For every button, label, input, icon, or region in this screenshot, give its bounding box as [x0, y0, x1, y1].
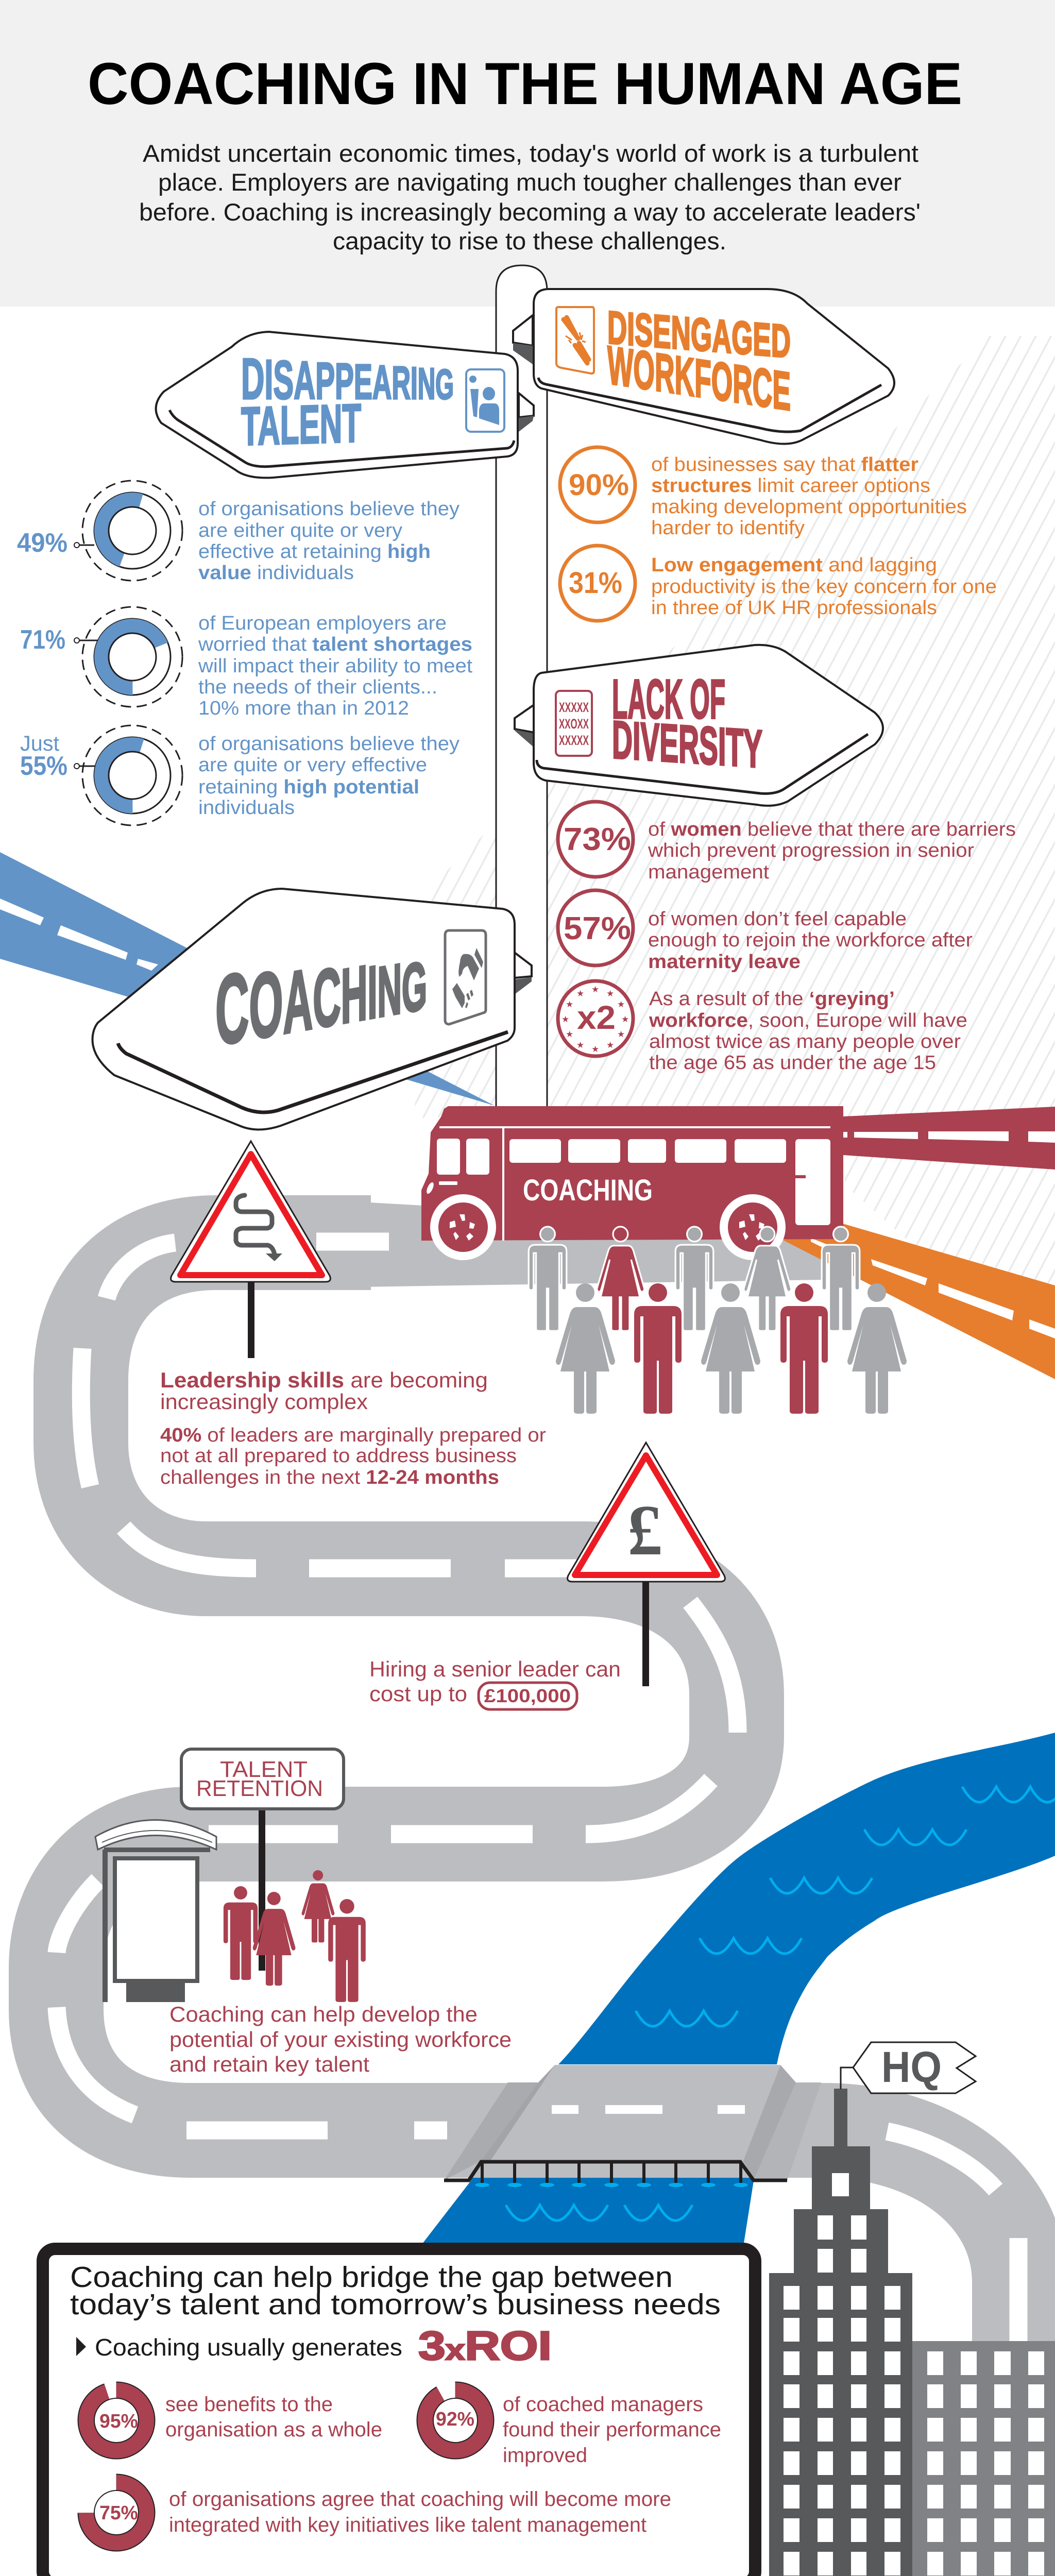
people group at bus [529, 1227, 907, 1414]
text: hiring cost [369, 1657, 621, 1709]
3x ROI callout: 3xROI [418, 2323, 552, 2368]
stat text 90% [651, 454, 967, 539]
icon: person at board [466, 369, 504, 432]
sign shadow line [537, 734, 868, 793]
signpost pole [496, 265, 547, 1108]
text: leadership skills: increasingly complex [160, 1389, 368, 1414]
stat text 95%: see benefits to the [165, 2393, 333, 2416]
sign shadow line [538, 378, 881, 432]
panel: disengaged workforce [513, 289, 894, 444]
panel: lack of diversity [515, 645, 883, 806]
intro text block: Amidst uncertain economic times, today's world of work is a turbulent [143, 140, 918, 167]
intro text block [139, 140, 921, 255]
panel: disengaged workforce statistics [560, 447, 997, 621]
icon: rows of x marks: XXXXX [559, 733, 589, 748]
header background panel [0, 0, 1055, 307]
stat text 49%: effective at retaining high [198, 541, 431, 563]
stat text x2: the age 65 as under the age 15 [649, 1052, 936, 1074]
stat text 49%: of organisations believe they [198, 498, 460, 520]
intro text block: place. Employers are navigating much tougher challenges than ever [158, 168, 901, 196]
stat text 73% [648, 819, 1016, 883]
river waves [506, 1787, 1055, 2221]
sign: disappearing talent [156, 332, 518, 478]
river [420, 1733, 1055, 2246]
stat text 49% [198, 498, 460, 584]
heading: disappearing talent: TALENT [241, 393, 361, 457]
donut chart: 71% [74, 607, 182, 707]
bridge deck dashes [552, 2105, 745, 2114]
stat text x2 [649, 988, 967, 1074]
stat text 75%: of organisations agree that coaching will become more [169, 2488, 671, 2511]
panel heading: Coaching can help bridge the gap between [70, 2261, 673, 2294]
sign: talent retention: TALENT [220, 1757, 308, 1782]
stat text 90%: structures limit career options [651, 475, 930, 497]
stat text 90%: making development opportunities [651, 496, 967, 518]
bus windows [425, 1126, 830, 1241]
stat text 57% [648, 908, 973, 973]
text: leadership skills [160, 1368, 546, 1488]
stat text 31%: productivity is the key concern for one [651, 576, 997, 598]
stat text 95% [165, 2393, 382, 2441]
panel heading [70, 2261, 721, 2321]
stat text 49%: value individuals [198, 562, 354, 584]
blue road [0, 852, 495, 1106]
hatched background [415, 336, 1055, 1370]
sign: lack of diversity [534, 645, 883, 806]
donut chart: 92% [426, 2391, 485, 2450]
panel: coaching bridges the gap [43, 2249, 755, 2576]
rear building [912, 2341, 1055, 2576]
text: leadership skills: not at all prepared to address business [160, 1445, 517, 1467]
bus body [421, 1106, 843, 1241]
stat text x2: workforce , soon, Europe will have [649, 1010, 967, 1031]
stat text 31% [651, 554, 997, 619]
sign back stub [515, 704, 535, 748]
stat circle 90% [560, 447, 635, 522]
bus front wheel [430, 1194, 496, 1260]
donut chart: 75% [87, 2482, 146, 2543]
text: hiring cost: Hiring a senior leader can [369, 1657, 621, 1681]
stat text 55%: of organisations believe they [198, 733, 460, 755]
arrow bullet [76, 2337, 86, 2356]
orange road [783, 1224, 1055, 1379]
bus [421, 1106, 843, 1260]
panel: coaching sign [93, 889, 532, 1129]
heading: lack of diversity: DIVERSITY [612, 710, 762, 779]
text: leadership skills: Leadership skills are becoming [160, 1368, 488, 1392]
sign back stub [519, 393, 534, 432]
bus shelter [95, 1820, 216, 2002]
stat text 73%: management [648, 861, 769, 883]
stat text 71%: will impact their ability to meet [198, 655, 472, 677]
stat text 71%: the needs of their clients... [198, 676, 437, 698]
stat text 55%: retaining high potential [198, 776, 419, 798]
text: hiring cost: cost up to [369, 1682, 467, 1706]
road sign: winding road [171, 1141, 330, 1358]
tower windows [784, 2173, 1044, 2575]
donut chart: 55% [74, 725, 182, 825]
stat text 75%: integrated with key initiatives like talent management [169, 2514, 646, 2536]
stat text 71%: worried that talent shortages [198, 634, 472, 655]
sign: coaching [93, 889, 515, 1129]
main tower [769, 2089, 912, 2576]
intro text block: capacity to rise to these challenges. [333, 227, 726, 255]
donut chart: 92%: 92% [436, 2409, 474, 2430]
stat text 75% [169, 2488, 671, 2536]
intro text block: before. Coaching is increasingly becoming a way to accelerate leaders' [139, 198, 921, 226]
stat text 49%: are either quite or very [198, 520, 402, 541]
stat text 55%: are quite or very effective [198, 754, 427, 776]
stat circle x2 with stars: x2 [577, 999, 616, 1036]
bridge water ripples [475, 2183, 748, 2187]
text: talent development [169, 2002, 512, 2076]
stat text 92%: found their performance [503, 2418, 721, 2441]
stat circle 57% [558, 890, 633, 965]
text: leadership skills: 40% of leaders are marginally prepared or [160, 1425, 546, 1446]
stat label: Just 55%: 55% [20, 751, 67, 781]
icon: broken chain [556, 307, 594, 374]
text: talent development: and retain key talent [169, 2052, 369, 2076]
back row figures [529, 1227, 860, 1331]
donut chart: 49% [74, 481, 182, 581]
stat text 73%: of women believe that there are barriers [648, 819, 1016, 840]
stat label 71%: 71% [20, 625, 65, 655]
icon: rows of x marks: XXOXX [559, 716, 589, 732]
stat text x2: almost twice as many people over [649, 1031, 961, 1053]
stat text 95%: organisation as a whole [165, 2418, 382, 2441]
stat text 55%: individuals [198, 797, 295, 819]
icon: pound symbol: £ [627, 1490, 662, 1570]
panel frame [43, 2249, 755, 2576]
stat text 90%: harder to identify [651, 517, 805, 539]
stat label 49%: 49% [17, 528, 67, 558]
sign: HQ [841, 2042, 976, 2093]
stat circle x2 with stars: ★★★★★★★★★★★★ [561, 985, 629, 1054]
heading: lack of diversity [612, 668, 762, 779]
heading: disappearing talent: DISAPPEARING [241, 347, 454, 411]
sign shadow line [169, 410, 514, 467]
people group at shelter [224, 1870, 366, 2002]
heading: disengaged workforce: DISENGAGED [607, 301, 791, 368]
stat text x2: As a result of the ‘greying’ [649, 988, 895, 1010]
stat text 90%: of businesses say that flatter [651, 454, 918, 476]
heading: lack of diversity: LACK OF [612, 668, 725, 730]
panel: disappearing talent statistics [17, 481, 472, 825]
heading: disappearing talent [241, 347, 454, 457]
stat label: Just 55%: Just [20, 731, 59, 755]
front row figures [556, 1283, 907, 1414]
stat text 71%: of European employers are [198, 613, 447, 634]
stat text 31%: Low engagement and lagging [651, 554, 937, 576]
road centre dashes [57, 1242, 1018, 2342]
stat text 71% [198, 613, 472, 719]
sign back stub [513, 315, 533, 364]
stat circle 90%: 90% [569, 468, 629, 502]
stat text 92%: improved [503, 2444, 587, 2467]
skyscrapers [769, 2089, 1055, 2576]
heading: disengaged workforce [607, 301, 791, 422]
sign: talent retention: RETENTION [196, 1776, 323, 1801]
bridge [444, 2065, 821, 2187]
panel: lack of diversity statistics [558, 802, 1016, 1074]
stat circle 73%: 73% [564, 822, 631, 857]
heading: coaching: COACHING [215, 920, 427, 1066]
bus label: COACHING [523, 1174, 653, 1207]
sign back stub [515, 953, 532, 994]
text: leadership skills: challenges in the next 12-24 months [160, 1467, 499, 1488]
stat text 57%: enough to rejoin the workforce after [648, 929, 973, 951]
panel: disappearing talent [156, 332, 534, 478]
stat text 71%: 10% more than in 2012 [198, 698, 409, 719]
sign: talent retention [181, 1749, 344, 1971]
crimson road [843, 1107, 1055, 1170]
sign: disengaged workforce [534, 289, 894, 444]
text: talent development: potential of your existing workforce [169, 2027, 512, 2052]
ROI sentence: Coaching usually generates [95, 2334, 402, 2361]
heading: disengaged workforce: WORKFORCE [607, 335, 791, 422]
stat circle 31%: 31% [569, 566, 622, 600]
donut chart: 95% [87, 2391, 146, 2450]
stat text 73%: which prevent progression in senior [648, 840, 974, 861]
stat text 31%: in three of UK HR professionals [651, 597, 937, 619]
stat text 92% [503, 2393, 721, 2467]
stat label: Just 55% [20, 731, 67, 781]
bridge railing [444, 2162, 787, 2183]
stat circle 31% [560, 546, 635, 621]
stat circle 73% [558, 802, 633, 877]
title: COACHING IN THE HUMAN AGE [88, 51, 962, 117]
icon: rows of x marks: XXXXX [559, 700, 589, 715]
callout: 100,000 pounds [479, 1683, 577, 1709]
text: talent development: Coaching can help develop the [169, 2002, 478, 2026]
stat text 55% [198, 733, 460, 819]
icon: rows of x marks [556, 691, 592, 756]
stat circle 57%: 57% [564, 911, 631, 946]
donut chart: 95%: 95% [99, 2411, 138, 2432]
bus rear wheel [720, 1194, 786, 1260]
sign: HQ: HQ [881, 2043, 942, 2091]
donut chart: 75%: 75% [99, 2502, 138, 2524]
winding grey road [56, 1202, 1019, 2349]
panel heading: today’s talent and tomorrow’s business needs [70, 2288, 721, 2321]
road sign: pound [568, 1443, 725, 1686]
callout: 100,000 pounds: £100,000 [484, 1685, 571, 1706]
stat text 57%: of women don’t feel capable [648, 908, 907, 930]
icon: winding arrow [236, 1195, 282, 1261]
stat text 57%: maternity leave [648, 951, 801, 973]
sign shadow line [118, 1032, 508, 1112]
icon: handshake [445, 930, 486, 1024]
stat text 92%: of coached managers [503, 2393, 703, 2416]
